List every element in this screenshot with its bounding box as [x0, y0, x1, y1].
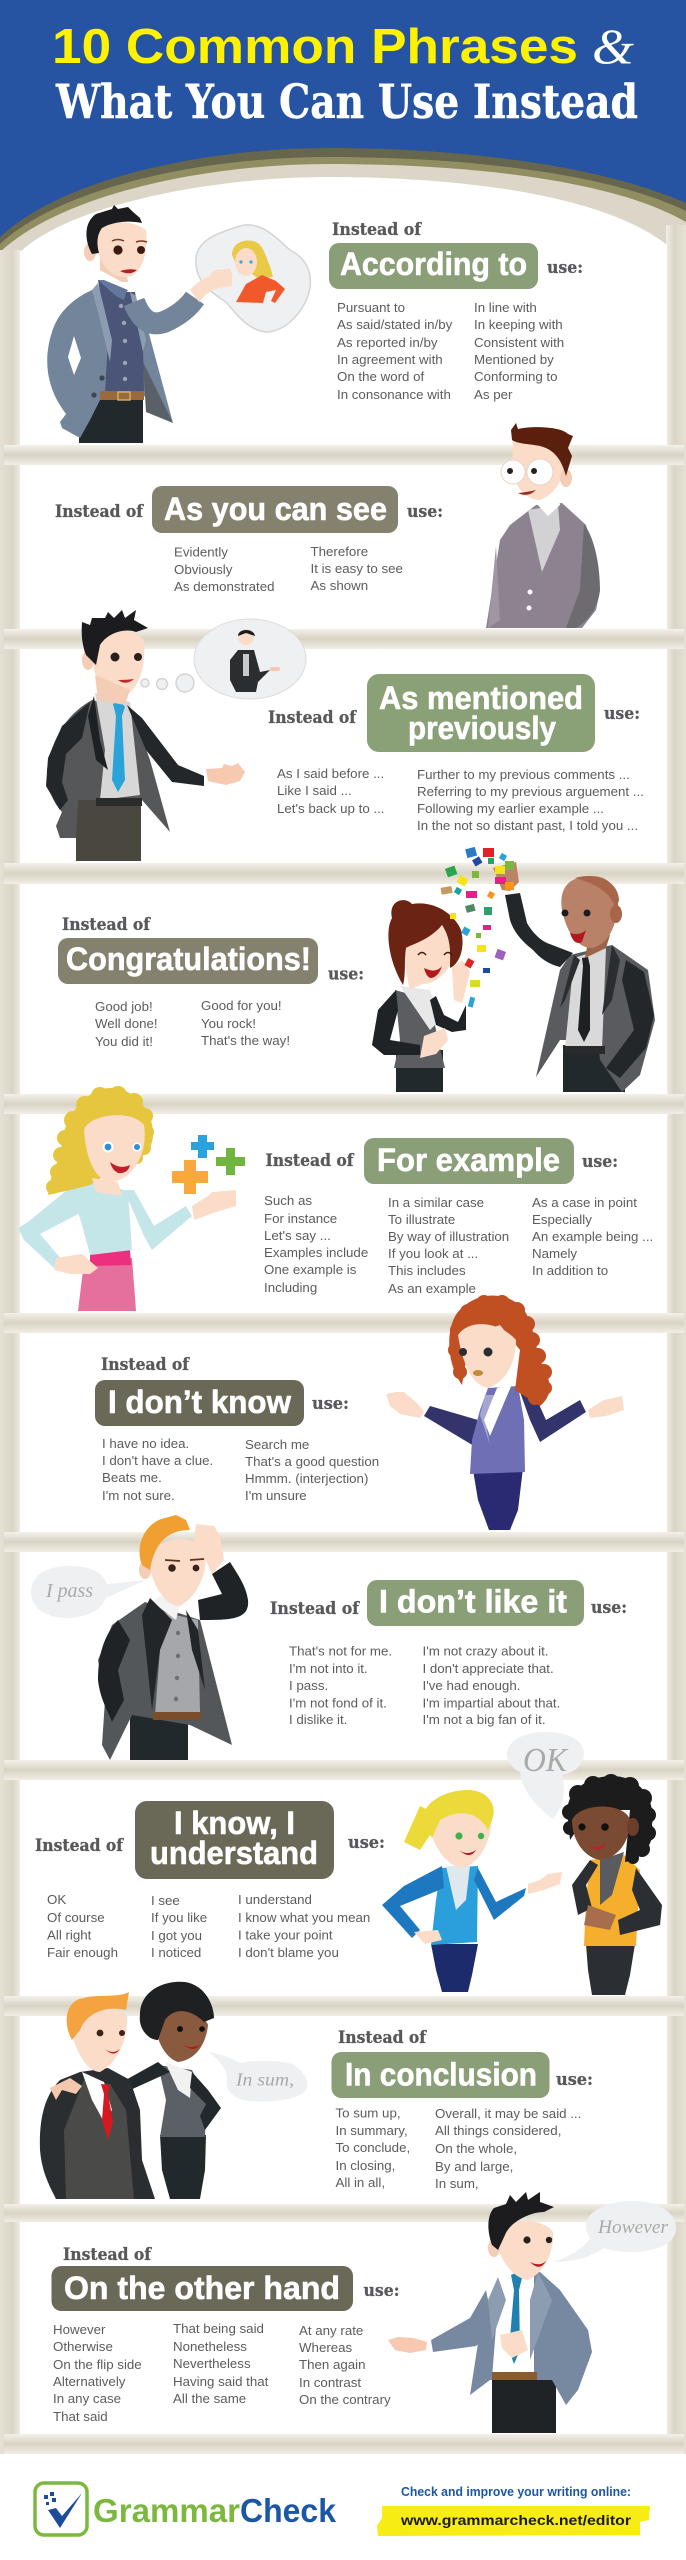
confetti: [441, 847, 514, 1008]
woman: [122, 1982, 221, 2199]
phrase pill: [367, 674, 595, 752]
alternatives column 1: You did it!: [95, 1034, 153, 1049]
alternatives column 1: In any case: [53, 2391, 121, 2406]
heading: instead of: Instead of: [62, 915, 152, 935]
alternatives column 2: As per: [474, 387, 513, 402]
alternatives column 1: Let's back up to ...: [277, 801, 384, 816]
panel: Congratulations: [58, 847, 655, 1092]
alternatives column 2: I'm unsure: [245, 1488, 307, 1503]
alternatives column 1: Evidently: [174, 544, 228, 560]
panel: As mentioned previously: [46, 610, 644, 861]
alternatives column 2: This includes: [388, 1263, 466, 1278]
use label: use:: [582, 1152, 618, 1172]
blonde woman with plus signs: [18, 1086, 236, 1311]
alternatives column 1: To conclude,: [336, 2140, 410, 2155]
arms: [424, 1406, 478, 1446]
alternatives column 2: If you like: [151, 1910, 207, 1925]
body: [486, 503, 600, 628]
head: [84, 1115, 145, 1182]
alternatives column 3: At any rate: [299, 2323, 363, 2338]
alternatives column 1: I'm not fond of it.: [289, 1696, 387, 1710]
heading: instead of: Instead of: [338, 2028, 428, 2048]
alternatives column 1: Let's say ...: [264, 1228, 331, 1243]
alternatives column 1: Alternatively: [53, 2374, 126, 2389]
phrase pill: previously: [408, 710, 556, 746]
alternatives column 2: I don't appreciate that.: [422, 1661, 554, 1676]
plus icons: [172, 1135, 245, 1194]
alternatives column 1: As demonstrated: [174, 579, 275, 594]
head: [495, 2221, 553, 2280]
hand: [190, 268, 232, 302]
alternatives column 3: As a case in point: [532, 1195, 637, 1210]
alternatives column 2: If you look at ...: [388, 1246, 478, 1261]
speech bubble: In sum: In sum,: [235, 2070, 294, 2090]
redhead woman shrugging: [386, 1295, 624, 1530]
use label: use:: [328, 964, 364, 984]
alternatives column 2: All the same: [173, 2391, 246, 2406]
speech bubble: However: However: [597, 2217, 669, 2238]
left arm: [431, 2290, 494, 2352]
alternatives column 2: In the not so distant past, I told you ...: [417, 818, 638, 833]
alternatives column 2: On the whole,: [435, 2141, 517, 2156]
footer: [35, 2483, 650, 2536]
alternatives column 3: I know what you mean: [238, 1910, 370, 1925]
thought bubble: [141, 619, 306, 699]
man pointing: [388, 2192, 676, 2433]
alternatives column 1: I don't have a clue.: [102, 1453, 213, 1468]
pants: [130, 1715, 188, 1760]
header background: [0, 0, 686, 300]
alternatives column 2: All things considered,: [435, 2123, 561, 2138]
dark-haired woman in orange vest: [562, 1774, 662, 1995]
alternatives column 3: Whereas: [299, 2340, 353, 2355]
alternatives column 2: Good for you!: [201, 998, 282, 1013]
panel: I don't know: [95, 1295, 624, 1530]
url banner: www.grammarcheck.net/editor: [400, 2512, 632, 2528]
phrase pill: As you can see: [164, 491, 387, 527]
head: [92, 630, 144, 694]
logo wordmark: Check: [240, 2492, 337, 2529]
skirt: [78, 1258, 136, 1311]
alternatives column 2: Nevertheless: [173, 2356, 251, 2371]
alternatives column 3: Namely: [532, 1246, 577, 1261]
hands: [386, 1392, 424, 1418]
alternatives column 2: Nonetheless: [173, 2339, 247, 2354]
alternatives column 3: On the contrary: [299, 2392, 391, 2407]
alternatives column 2: To illustrate: [388, 1212, 455, 1227]
phrase pill: In conclusion: [345, 2056, 537, 2092]
phrase pill: [135, 1801, 334, 1879]
alternatives column 2: I've had enough.: [422, 1678, 520, 1693]
speech bubble: OK: [507, 1732, 584, 1819]
heading: instead of: Instead of: [63, 2245, 153, 2265]
raised arm: [198, 1562, 248, 1620]
alternatives column 3: In addition to: [532, 1263, 608, 1278]
title: 10 Common Phrases: [52, 20, 578, 74]
phrase pill: I know, I: [174, 1805, 295, 1841]
arm: [134, 298, 195, 323]
alternatives column 1: Such as: [264, 1193, 312, 1208]
use label: use:: [348, 1833, 385, 1853]
alternatives column 1: Good job!: [95, 999, 153, 1014]
alternatives column 1: I have no idea.: [102, 1436, 189, 1451]
alternatives column 3: Then again: [299, 2357, 366, 2372]
vest: [152, 1610, 200, 1715]
alternatives column 1: Fair enough: [47, 1945, 118, 1960]
use label: use:: [591, 1598, 627, 1618]
heading: instead of: Instead of: [332, 220, 423, 240]
alternatives column 2: Having said that: [173, 2374, 269, 2389]
alternatives column 2: That's a good question: [245, 1454, 379, 1469]
alternatives column 2: That being said: [173, 2321, 264, 2336]
tie: [112, 700, 125, 792]
alternatives column 1: I pass.: [289, 1678, 328, 1693]
shirt: [98, 280, 144, 392]
alternatives column 2: In keeping with: [474, 317, 563, 332]
shirt: [492, 2272, 534, 2380]
speech bubble: In sum: [208, 2052, 307, 2102]
alternatives column 1: Otherwise: [53, 2339, 113, 2354]
speech bubble: I pass: I pass: [45, 1580, 93, 1602]
heading: instead of: Instead of: [101, 1355, 191, 1375]
alternatives column 1: Including: [264, 1280, 317, 1295]
pants: [76, 795, 141, 861]
alternatives column 3: I take your point: [238, 1928, 333, 1942]
phrase pill: Congratulations!: [66, 941, 311, 977]
dark sleeve: [98, 1620, 130, 1722]
alternatives column 2: In a similar case: [388, 1195, 484, 1210]
alternatives column 2: As shown: [310, 578, 368, 593]
speech bubble: However: [553, 2201, 676, 2262]
alternatives column 1: Obviously: [174, 562, 233, 577]
phrase pill: As mentioned: [379, 680, 583, 716]
alternatives column 1: Like I said ...: [277, 783, 352, 798]
url banner: [377, 2506, 650, 2536]
use label: use:: [407, 502, 443, 522]
man with thought bubble: [47, 205, 310, 443]
alternatives column 2: In sum,: [435, 2176, 479, 2191]
alternatives column 1: For instance: [264, 1211, 337, 1226]
alternatives column 2: Search me: [245, 1437, 309, 1452]
head: [458, 1324, 516, 1388]
speech bubble: OK: OK: [523, 1742, 569, 1779]
skirt: [473, 1468, 523, 1530]
phrase pill: [95, 1380, 304, 1426]
alternatives column 2: You rock!: [201, 1016, 256, 1031]
woman inside bubble: [232, 241, 285, 303]
phrase pill: understand: [150, 1835, 318, 1871]
man with wide eyes: [486, 423, 600, 628]
panel: According to: [47, 205, 583, 443]
title: &: [592, 18, 634, 74]
phrase pill: [367, 1580, 584, 1626]
alternatives column 2: Mentioned by: [474, 352, 554, 367]
heading: instead of: Instead of: [35, 1836, 125, 1856]
alternatives column 1: Pursuant to: [337, 300, 405, 315]
hair: [46, 1086, 154, 1195]
alternatives column 1: All right: [47, 1928, 92, 1942]
alternatives column 1: In summary,: [336, 2123, 408, 2138]
belt: [100, 391, 144, 400]
alternatives column 2: Referring to my previous arguement ...: [417, 784, 644, 799]
alternatives column 1: OK: [47, 1892, 66, 1907]
alternatives column 2: I see: [151, 1893, 180, 1908]
top: [70, 1180, 132, 1255]
jacket: [47, 290, 173, 438]
hands: [192, 1190, 236, 1220]
alternatives column 1: I'm not into it.: [289, 1661, 368, 1676]
alternatives column 1: That's not for me.: [289, 1644, 392, 1658]
alternatives column 1: All in all,: [336, 2175, 385, 2190]
panel: I know, I understand: [35, 1732, 662, 1995]
head and hair: [148, 1539, 206, 1606]
alternatives column 1: Well done!: [95, 1016, 158, 1031]
alternatives column 2: I'm not crazy about it.: [422, 1644, 548, 1658]
alternatives column 2: By way of illustration: [388, 1229, 509, 1244]
alternatives column 1: I'm not sure.: [102, 1488, 175, 1503]
use label: use:: [547, 258, 583, 278]
phrase pill: I don’t know: [108, 1384, 291, 1420]
alternatives column 1: In consonance with: [337, 387, 451, 402]
alternatives column 1: On the word of: [337, 369, 425, 384]
panel: In conclusion: [40, 1982, 593, 2199]
alternatives column 1: In closing,: [336, 2158, 395, 2173]
alternatives column 2: I got you: [151, 1928, 202, 1943]
woman and man with confetti: [372, 847, 655, 1092]
speech bubble: I pass: [31, 1566, 146, 1618]
alternatives column 1: In agreement with: [337, 352, 443, 367]
alternatives column 3: In contrast: [299, 2375, 361, 2390]
use label: use:: [312, 1394, 349, 1414]
woman: [372, 900, 470, 1092]
alternatives column 2: Consistent with: [474, 335, 564, 350]
heading: instead of: Instead of: [268, 708, 358, 728]
alternatives column 2: I'm impartial about that.: [422, 1696, 560, 1710]
alternatives column 2: By and large,: [435, 2159, 513, 2174]
shirt: [95, 693, 140, 800]
alternatives column 2: I noticed: [151, 1945, 201, 1960]
phrase pill: I don’t like it: [379, 1584, 567, 1620]
jacket: [470, 2272, 592, 2405]
heading: instead of: Instead of: [266, 1151, 355, 1171]
use label: use:: [604, 704, 640, 724]
alternatives column 2: I'm not a big fan of it.: [422, 1712, 546, 1727]
hand: [206, 763, 245, 785]
alternatives column 2: Hmmm. (interjection): [245, 1471, 368, 1486]
alternatives column 2: Therefore: [310, 544, 368, 559]
alternatives column 3: Especially: [532, 1212, 592, 1227]
phrase pill: On the other hand: [64, 2270, 340, 2306]
alternatives column 1: Of course: [47, 1910, 105, 1925]
hair: [448, 1295, 552, 1406]
alternatives column 2: Further to my previous comments ...: [417, 767, 630, 782]
alternatives column 1: As I said before ...: [277, 766, 384, 781]
alternatives column 2: Following my earlier example ...: [417, 801, 604, 816]
alternatives column 1: However: [53, 2322, 106, 2337]
alternatives column 1: To sum up,: [336, 2106, 401, 2120]
pants: [492, 2378, 556, 2433]
heading: instead of: Instead of: [55, 502, 145, 522]
phrase pill: For example: [377, 1142, 560, 1178]
heading: instead of: Instead of: [270, 1599, 361, 1619]
alternatives column 2: Overall, it may be said ...: [435, 2106, 581, 2121]
title: [52, 18, 638, 130]
pointing hand: [388, 2337, 427, 2353]
man and woman together: [40, 1982, 307, 2199]
hand: [194, 1524, 224, 1574]
man: [493, 862, 655, 1092]
panel: As you can see: [55, 423, 600, 628]
jacket: [98, 1602, 232, 1760]
alternatives column 3: I don't blame you: [238, 1945, 339, 1960]
alternatives column 3: I understand: [238, 1892, 312, 1907]
man with hand on forehead: [31, 1515, 248, 1760]
alternatives column 1: One example is: [264, 1262, 357, 1277]
panel: On the other hand: [52, 2192, 676, 2433]
man: [40, 1992, 155, 2199]
alternatives column 1: I dislike it.: [289, 1712, 347, 1727]
alternatives column 2: It is easy to see: [310, 561, 403, 576]
alternatives column 2: As an example: [388, 1281, 476, 1296]
panel: I don't like it: [31, 1515, 627, 1760]
man recalling: [46, 610, 306, 861]
tagline: Check and improve your writing online:: [401, 2484, 631, 2499]
jacket: [470, 1386, 525, 1474]
alternatives column 2: In line with: [474, 300, 537, 315]
pants: [79, 395, 143, 443]
alternatives column 3: An example being ...: [532, 1229, 653, 1244]
alternatives column 1: As said/stated in/by: [337, 317, 453, 332]
alternatives column 1: As reported in/by: [337, 335, 438, 350]
hand near chest: [500, 2330, 528, 2358]
two women talking: [382, 1732, 662, 1995]
alternatives column 1: Examples include: [264, 1245, 368, 1260]
alternatives column 2: Conforming to: [474, 369, 558, 384]
dark sleeves: [46, 702, 90, 810]
thought bubble: [196, 225, 310, 332]
use label: use:: [364, 2281, 400, 2301]
head: [512, 434, 565, 500]
phrase pill: According to: [340, 246, 527, 282]
alternatives column 2: That's the way!: [201, 1033, 290, 1048]
logo wordmark: Grammar: [93, 2492, 240, 2529]
blonde woman: [382, 1790, 562, 1992]
raised arm: [505, 893, 573, 967]
logo icon: [35, 2483, 87, 2535]
head: [100, 255, 128, 282]
alternatives column 1: That said: [53, 2409, 108, 2424]
alternatives column 1: Beats me.: [102, 1470, 162, 1485]
jacket: [47, 700, 170, 838]
panel: For example: [18, 1086, 653, 1311]
use label: use:: [556, 2070, 593, 2090]
alternatives column 1: On the flip side: [53, 2357, 142, 2372]
